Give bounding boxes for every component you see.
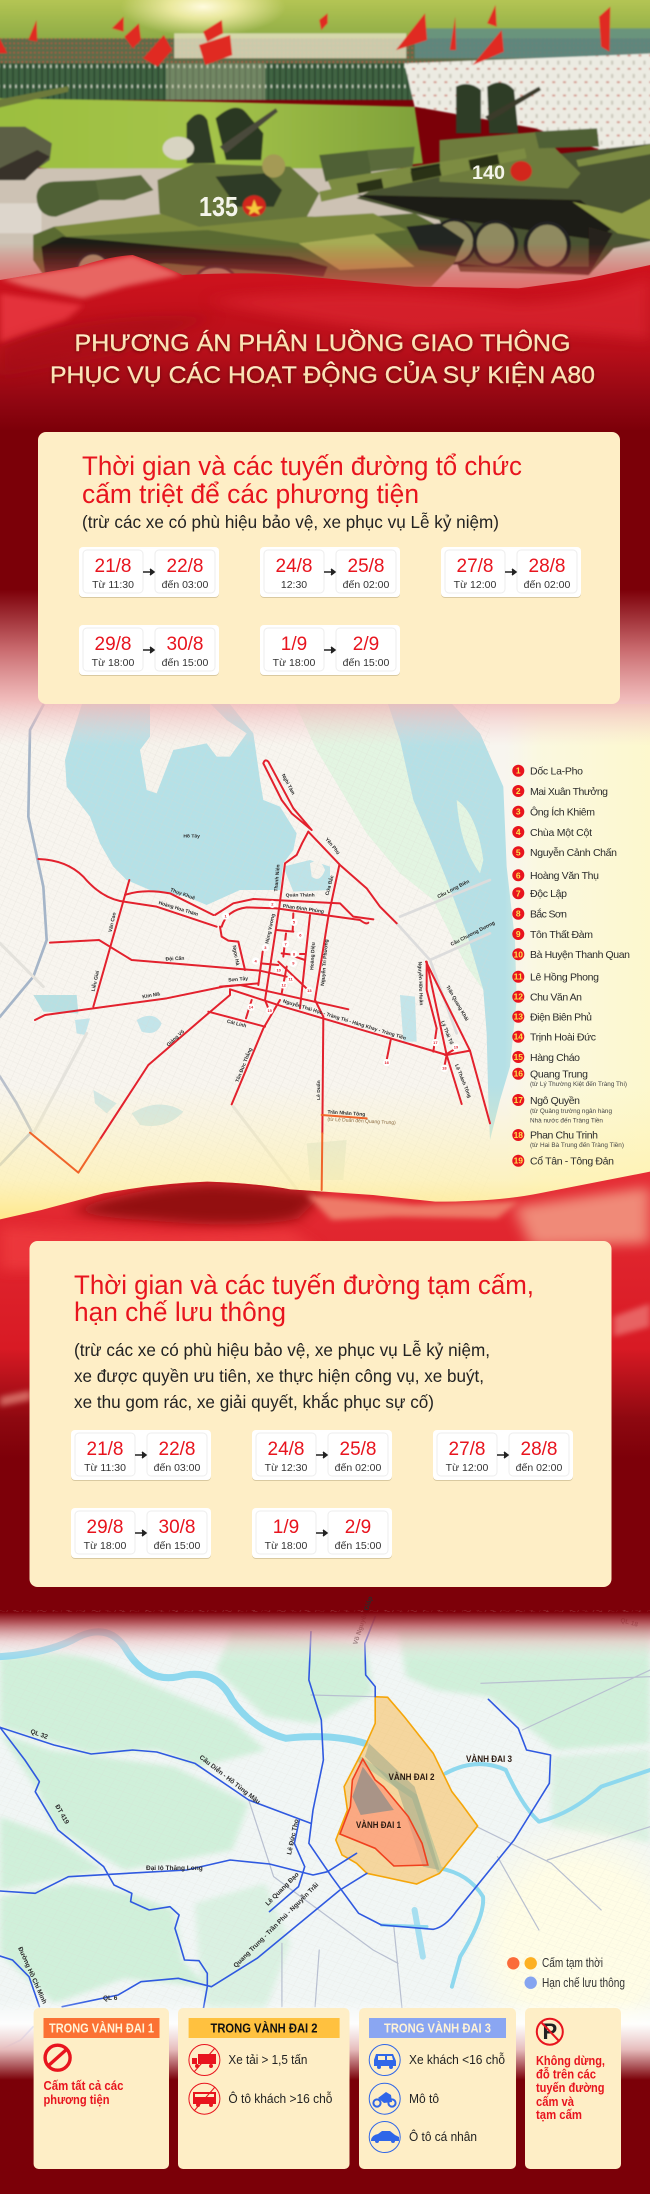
date chip 21/8 to 22/8: Từ 11:30 xyxy=(84,1462,126,1474)
map 1 legend: numbered street list: Dốc La-Pho xyxy=(530,766,583,778)
back tank 140 xyxy=(357,143,650,275)
card: inside ring 1: Cấm tất cả các xyxy=(44,2079,124,2093)
map 2 legend: Cấm tạm thời xyxy=(542,1956,603,1970)
road name labels: Cầu Chương Dương xyxy=(450,920,496,948)
date chip 27/8 to 28/8: Từ 12:00 xyxy=(454,579,496,591)
date chip 29/8 to 30/8: Từ 18:00 xyxy=(84,1540,126,1552)
map 1 legend: numbered street list: 8 xyxy=(516,909,521,919)
red ribbon banner xyxy=(0,255,650,430)
road name labels: Văn Cao xyxy=(108,912,118,933)
map 2 terrain and water xyxy=(0,1610,650,2070)
numbered map markers: 3 xyxy=(264,945,267,950)
date chip 1/9 to 2/9: đến 15:00 xyxy=(343,657,390,669)
map 1 legend: numbered street list: 16 xyxy=(514,1069,523,1079)
road name labels: (từ Lê Duẩn đến Quang Trung) xyxy=(327,1116,396,1126)
map 1 legend: numbered street list: 10 xyxy=(514,949,523,959)
road name labels: Giảng Võ xyxy=(166,1029,186,1048)
map 1 legend: numbered street list: Bắc Sơn xyxy=(530,908,567,920)
map 1 legend: numbered street list: 4 xyxy=(516,827,521,837)
panel 2 note: (trừ các xe có phù hiệu bảo vệ, xe phục vụ Lễ kỷ niệm, xyxy=(74,1339,490,1360)
date chip 27/8 to 28/8 xyxy=(441,547,581,598)
card: inside ring 1 xyxy=(34,2008,169,2169)
date chip 1/9 to 2/9: 1/9 xyxy=(273,1517,299,1538)
date chip 1/9 to 2/9 xyxy=(260,625,400,676)
card: inside ring 3: TRONG VÀNH ĐAI 3 xyxy=(384,2020,491,2036)
panel 2 heading xyxy=(74,1270,534,1327)
numbered map markers: 19 xyxy=(454,1045,459,1050)
map 1 legend: numbered street list: 7 xyxy=(516,888,521,898)
road name labels: Hùng Vương xyxy=(264,913,277,944)
panel 2 heading: Thời gian và các tuyến đường tạm cấm, xyxy=(74,1270,534,1300)
card: inside ring 3: Mô tô xyxy=(409,2092,439,2106)
date chip 21/8 to 22/8: 21/8 xyxy=(87,1439,123,1460)
date chip 1/9 to 2/9 xyxy=(252,1508,392,1559)
panel 1 heading: cấm triệt để các phương tiện xyxy=(82,479,419,509)
grey ring and bridge roads xyxy=(0,705,490,1193)
road name labels: Hoàng Diệu xyxy=(309,942,317,970)
numbered map markers xyxy=(222,901,460,1072)
card: no stopping or parking: cấm và xyxy=(536,2095,574,2109)
map 1 legend: numbered street list: Quang Trung xyxy=(530,1068,588,1080)
main title xyxy=(50,329,595,389)
road name labels: Hồ Tây xyxy=(183,834,200,840)
road name labels: Ngọc Hà xyxy=(231,945,240,966)
road name labels: Cát Linh xyxy=(226,1019,247,1029)
road name labels: Lê Duẩn xyxy=(315,1080,322,1100)
date chip 27/8 to 28/8: đến 02:00 xyxy=(524,579,571,591)
map 2 road labels: Võ Nguyên Giáp xyxy=(352,1596,374,1646)
closed routes xyxy=(30,760,490,1190)
panel 2: temporary-ban schedule xyxy=(30,1241,612,1587)
map 1: central Hanoi road closures xyxy=(0,590,650,1225)
date chip 29/8 to 30/8: đến 15:00 xyxy=(154,1540,201,1552)
map 1 legend: numbered street list: 15 xyxy=(514,1052,523,1062)
map 1 legend: numbered street list: (từ Hai Bà Trung đến Tràng Tiền) xyxy=(530,1143,624,1149)
numbered map markers: 6 xyxy=(299,933,302,938)
card: inside ring 1: phương tiện xyxy=(44,2093,110,2107)
road name labels: Nguyễn Thái Học - Tràng Thi - Hàng Khay - Tràng Tiền xyxy=(282,998,407,1042)
map 2 road labels: QL 18 xyxy=(619,1617,639,1629)
icon: no parking: P xyxy=(542,2019,557,2044)
ring name labels: VÀNH ĐAI 3 xyxy=(466,1754,512,1765)
map 2 road labels: Đại lộ Thăng Long xyxy=(146,1865,203,1872)
card: no stopping or parking: đỗ trên các xyxy=(536,2066,596,2082)
map 1 legend: numbered street list: Ngô Quyền xyxy=(530,1095,580,1107)
map 1 legend: numbered street list: 12 xyxy=(514,992,523,1002)
road name labels: Lê Thánh Tông xyxy=(453,1063,472,1099)
map 1 legend: numbered street list: (từ Lý Thường Kiệt đến Tràng Thi) xyxy=(530,1082,627,1088)
road name labels: Quán Thánh xyxy=(286,893,315,899)
date chip 24/8 to 25/8 xyxy=(252,1430,392,1481)
left partial tank xyxy=(0,127,52,180)
map 1 legend: numbered street list: Mai Xuân Thưởng xyxy=(530,786,608,798)
date chip 1/9 to 2/9: 2/9 xyxy=(345,1517,371,1538)
map 2 road labels: Đường Hồ Chí Minh xyxy=(16,1945,49,2005)
map 2 road labels: Lê Đức Thọ xyxy=(286,1819,300,1855)
numbered map markers: 11 xyxy=(289,977,294,982)
date chip 27/8 to 28/8: 28/8 xyxy=(529,556,565,577)
map 1 legend: numbered street list: 19 xyxy=(514,1156,523,1166)
top fade over map xyxy=(0,590,650,746)
map 2 road labels: QL 32 xyxy=(29,1728,49,1741)
icon: no entry xyxy=(45,2045,70,2070)
date chip 21/8 to 22/8 xyxy=(79,547,219,598)
date chip 1/9 to 2/9: 2/9 xyxy=(353,634,379,655)
hero tank numbers: 135 xyxy=(199,191,238,222)
date chip 21/8 to 22/8: 22/8 xyxy=(159,1439,195,1460)
date chip 29/8 to 30/8 xyxy=(71,1508,211,1559)
restricted blue routes xyxy=(0,1617,551,2050)
icon: van xyxy=(369,2044,400,2076)
card: inside ring 1: TRONG VÀNH ĐAI 1 xyxy=(49,2020,154,2036)
road name labels: Liễu Giai xyxy=(90,969,101,992)
date chip 27/8 to 28/8: 27/8 xyxy=(449,1439,485,1460)
hero tank numbers: 140 xyxy=(472,163,505,184)
numbered map markers: 10 xyxy=(276,967,282,972)
numbered map markers: 2 xyxy=(271,902,274,907)
numbered map markers: 9 xyxy=(292,961,295,966)
numbered map markers: 12 xyxy=(281,982,287,987)
map 1 legend: numbered street list: 14 xyxy=(514,1032,523,1042)
ring 2 and ring 1 zones xyxy=(336,1697,478,1884)
main title: PHỤC VỤ CÁC HOẠT ĐỘNG CỦA SỰ KIỆN A80 xyxy=(50,360,595,389)
road name labels xyxy=(90,773,496,1126)
date chip 29/8 to 30/8: đến 15:00 xyxy=(162,657,209,669)
date chip 24/8 to 25/8: đến 02:00 xyxy=(335,1462,382,1474)
road name labels: Đội Cấn xyxy=(165,955,185,963)
date chip 1/9 to 2/9: Từ 18:00 xyxy=(273,657,315,669)
numbered map markers: 7 xyxy=(285,941,288,946)
road name labels: Thụy Khuê xyxy=(169,887,196,902)
date chip 1/9 to 2/9: Từ 18:00 xyxy=(265,1540,307,1552)
front tank 135 xyxy=(33,213,464,287)
map 2: ring road restrictions xyxy=(0,1596,650,2080)
numbered map markers: 16 xyxy=(384,1060,390,1065)
map 1 legend: numbered street list: 13 xyxy=(514,1012,523,1022)
date chip 29/8 to 30/8: 29/8 xyxy=(95,634,131,655)
map 2 base xyxy=(0,1613,650,2075)
map 1 legend: numbered street list: Điện Biên Phủ xyxy=(530,1012,592,1024)
date chip 29/8 to 30/8 xyxy=(79,625,219,676)
map 2 legend xyxy=(507,1956,625,1990)
bottom fade over map xyxy=(0,1085,650,1220)
panel 1 note: (trừ các xe có phù hiệu bảo vệ, xe phục vụ Lễ kỷ niệm) xyxy=(82,511,499,532)
date chip 27/8 to 28/8 xyxy=(433,1430,573,1481)
ring name labels: VÀNH ĐAI 1 xyxy=(356,1820,402,1831)
date chip 24/8 to 25/8: 25/8 xyxy=(340,1439,376,1460)
card: inside ring 3 xyxy=(359,2008,516,2169)
date chip 24/8 to 25/8: 12:30 xyxy=(281,579,307,591)
hero tank numbers xyxy=(199,163,505,222)
map 1 legend: numbered street list: Bà Huyện Thanh Quan xyxy=(530,949,630,961)
numbered map markers: 14 xyxy=(249,1005,254,1010)
numbered map markers: 4 xyxy=(255,958,258,963)
road name labels: Cửa Bắc xyxy=(324,874,336,896)
road name labels: Kim Mã xyxy=(142,991,161,1000)
map 1 legend: numbered street list: Lê Hồng Phong xyxy=(530,972,599,984)
ring name labels: VÀNH ĐAI 2 xyxy=(388,1772,434,1783)
map 2 legend: Hạn chế lưu thông xyxy=(542,1976,625,1990)
panel 1: full-ban schedule xyxy=(38,432,620,704)
date chip 1/9 to 2/9: 1/9 xyxy=(281,634,307,655)
date chip 29/8 to 30/8: 30/8 xyxy=(159,1517,195,1538)
map 1 legend: numbered street list: Chùa Một Cột xyxy=(530,827,592,839)
icon: no parking xyxy=(537,2019,563,2045)
date chip 21/8 to 22/8: 22/8 xyxy=(167,556,203,577)
card: inside ring 2: Ô tô khách >16 chỗ xyxy=(228,2091,332,2106)
map 1 legend: numbered street list: Hàng Cháo xyxy=(530,1052,580,1064)
icon: no bus xyxy=(189,2083,220,2114)
date chip 1/9 to 2/9: đến 15:00 xyxy=(335,1540,382,1552)
date chip 21/8 to 22/8: đến 03:00 xyxy=(162,579,209,591)
right side map tint xyxy=(505,704,650,1204)
map 1 legend: numbered street list: 11 xyxy=(514,972,523,982)
date chip 29/8 to 30/8: Từ 18:00 xyxy=(92,657,134,669)
map 1 legend: numbered street list: Cổ Tân - Tông Đản xyxy=(530,1156,614,1168)
numbered map markers: 13 xyxy=(307,988,312,993)
panel 2 note: xe được quyền ưu tiên, xe thực hiện công vụ, xe buýt, xyxy=(74,1366,484,1386)
date chip 24/8 to 25/8: Từ 12:30 xyxy=(265,1462,307,1474)
road name labels: Hoàng Hoa Thám xyxy=(158,900,199,918)
card: inside ring 2: Xe tải > 1,5 tấn xyxy=(228,2053,307,2067)
date chip 24/8 to 25/8: 24/8 xyxy=(276,556,312,577)
card: inside ring 2 xyxy=(178,2008,350,2169)
panel 1 heading: Thời gian và các tuyến đường tổ chức xyxy=(82,451,522,481)
map 1 legend: numbered street list: 18 xyxy=(514,1130,523,1140)
ring name labels xyxy=(356,1754,512,1831)
date chip 29/8 to 30/8: 29/8 xyxy=(87,1517,123,1538)
bottom fade of map 2 xyxy=(0,2000,650,2080)
icon: no truck xyxy=(189,2044,220,2076)
date chip 21/8 to 22/8: 21/8 xyxy=(95,556,131,577)
icon: car xyxy=(369,2122,400,2152)
road name labels: Cầu Long Biên xyxy=(437,879,471,900)
card: no stopping or parking: Không dừng, xyxy=(536,2054,605,2068)
card: inside ring 3: Ô tô cá nhân xyxy=(409,2129,477,2144)
map 1 legend: numbered street list: (từ Quảng trường ngân hàng xyxy=(530,1109,612,1115)
map 1 legend: numbered street list: Trịnh Hoài Đức xyxy=(530,1032,596,1044)
date chip 24/8 to 25/8: 24/8 xyxy=(268,1439,304,1460)
panel 1 heading xyxy=(82,451,522,509)
map 2 road labels: QL 6 xyxy=(103,1995,118,2002)
road name labels: Phan Đình Phùng xyxy=(282,903,324,915)
date chip 27/8 to 28/8: Từ 12:00 xyxy=(446,1462,488,1474)
date chip 27/8 to 28/8: 27/8 xyxy=(457,556,493,577)
date chip 24/8 to 25/8: đến 02:00 xyxy=(343,579,390,591)
panel 2 note xyxy=(74,1339,490,1412)
map 2 road labels: Lê Quang Đạo xyxy=(264,1871,301,1907)
top fade of map 2 xyxy=(0,1612,650,1662)
date chip 27/8 to 28/8: 28/8 xyxy=(521,1439,557,1460)
numbered map markers: 15 xyxy=(267,1008,273,1013)
date chip 21/8 to 22/8: Từ 11:30 xyxy=(92,579,134,591)
date chip 21/8 to 22/8 xyxy=(71,1430,211,1481)
map 2 road labels: Quang Trung - Trần Phú - Nguyễn Trãi xyxy=(231,1880,320,1969)
road name labels: Yên Phụ xyxy=(323,837,341,856)
main title: PHƯƠNG ÁN PHÂN LUỒNG GIAO THÔNG xyxy=(74,329,570,357)
map 2 road labels: Cầu Diễn - Hồ Tùng Mậu xyxy=(198,1752,263,1806)
map 1 legend: numbered street list: Nhà nước đến Tràng Tiền xyxy=(530,1119,603,1125)
card: inside ring 3: Xe khách <16 chỗ xyxy=(409,2052,505,2067)
road name labels: Sơn Tây xyxy=(228,976,249,984)
card: no stopping or parking: tuyến đường xyxy=(536,2081,604,2095)
numbered map markers: 8 xyxy=(293,951,296,956)
date chip 29/8 to 30/8: 30/8 xyxy=(167,634,203,655)
map 1 legend: numbered street list: 1 xyxy=(516,766,521,776)
road name labels: Nghi Tàm xyxy=(280,773,296,796)
date chip 24/8 to 25/8 xyxy=(260,547,400,598)
map 1 legend: numbered street list: Nguyễn Cảnh Chấn xyxy=(530,846,617,859)
road name labels: Thanh Niên xyxy=(273,864,282,892)
map 1 legend: numbered street list: 2 xyxy=(516,786,521,796)
map 1 legend: numbered street list: Hoàng Văn Thụ xyxy=(530,870,599,882)
card: no stopping or parking xyxy=(525,2008,621,2169)
map 1 legend: numbered street list: 17 xyxy=(514,1095,523,1105)
numbered map markers: 18 xyxy=(442,1066,447,1071)
panel 2 note: xe thu gom rác, xe giải quyết, khắc phục sự cố) xyxy=(74,1391,434,1412)
road name labels: Lý Thái Tổ xyxy=(439,1020,455,1046)
hero photo: tanks parade xyxy=(0,0,650,290)
map 1 legend: numbered street list: Tôn Thất Đàm xyxy=(530,929,593,941)
map 2 road labels: ĐT 419 xyxy=(53,1804,70,1826)
road name labels: Nguyễn Tri Phương xyxy=(319,939,330,986)
map 1 legend: numbered street list: Phan Chu Trinh xyxy=(530,1130,598,1142)
road name labels: Nguyễn Hữu Huân xyxy=(416,961,425,1005)
map 1 legend: numbered street list: Ông Ích Khiêm xyxy=(530,806,595,818)
road name labels: Trần Nhân Tông xyxy=(327,1109,365,1118)
map 1 legend: numbered street list: 9 xyxy=(516,929,521,939)
map 1 legend: numbered street list: 5 xyxy=(516,847,521,857)
card: inside ring 2: TRONG VÀNH ĐAI 2 xyxy=(210,2020,318,2036)
numbered map markers: 5 xyxy=(293,920,296,925)
soldiers front xyxy=(187,114,216,163)
road name labels: Trần Quang Khải xyxy=(444,985,470,1023)
date chip 24/8 to 25/8: 25/8 xyxy=(348,556,384,577)
map 2 road labels xyxy=(16,1596,639,2005)
panel 2 heading: hạn chế lưu thông xyxy=(74,1297,286,1327)
map 1 legend: numbered street list: Chu Văn An xyxy=(530,992,582,1004)
road name labels: Tôn Đức Thắng xyxy=(234,1047,254,1083)
icon: motorbike xyxy=(369,2083,400,2114)
numbered map markers: 1 xyxy=(225,913,228,918)
date chip 21/8 to 22/8: đến 03:00 xyxy=(154,1462,201,1474)
map 1 legend: numbered street list: Độc Lập xyxy=(530,888,567,900)
second red ribbon background xyxy=(0,1172,650,1444)
card: no stopping or parking: tạm cấm xyxy=(536,2108,582,2122)
date chip 27/8 to 28/8: đến 02:00 xyxy=(516,1462,563,1474)
numbered map markers: 17 xyxy=(433,1040,438,1045)
map base land xyxy=(0,592,650,1225)
flags group xyxy=(0,5,610,67)
map 1 legend: numbered street list: 6 xyxy=(516,870,521,880)
map 1 legend: numbered street list: 3 xyxy=(516,807,521,817)
map 1 legend: numbered street list xyxy=(512,765,630,1168)
